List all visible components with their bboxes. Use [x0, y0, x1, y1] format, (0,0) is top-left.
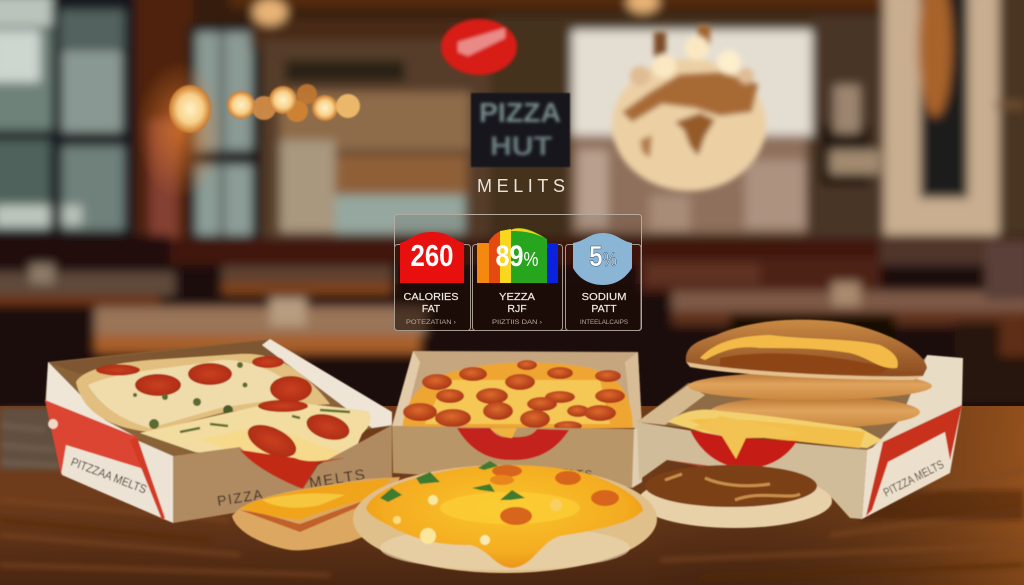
red half circle logo: [457, 428, 569, 460]
stacked melt three: [710, 396, 920, 428]
printed end of box: [45, 400, 173, 523]
large front melt: [353, 461, 657, 573]
box inner walls: [637, 355, 960, 450]
white flaps: [46, 362, 138, 438]
card: calories: [394, 232, 470, 330]
card: sodium: SODIUM: [582, 291, 626, 303]
left pizza box: [45, 339, 392, 523]
nutrition panel: [394, 214, 642, 330]
stacked melt one: [686, 320, 927, 380]
red brown pillar: [135, 0, 193, 280]
tables: [0, 272, 175, 296]
card: sodium: [566, 233, 641, 330]
right wall: [812, 15, 887, 240]
melted cheese: [366, 465, 643, 568]
back walls: [392, 351, 642, 428]
booth band: [0, 238, 1024, 268]
wooden table: [0, 406, 1024, 585]
pepperoni pizza: [402, 360, 633, 431]
front pizza slice: [140, 400, 371, 489]
card: calories: 260: [410, 238, 454, 273]
white back window: [572, 30, 812, 136]
pizza hut chalkboard sign: HUT: [490, 131, 553, 161]
pizza hut chalkboard sign: [471, 93, 570, 167]
central brown wall: [490, 15, 890, 240]
kraft side of box: PIZZA: [216, 486, 265, 509]
cheese melt in box: [668, 410, 882, 458]
blurred restaurant background: [0, 0, 1024, 420]
card: sodium: 5%: [589, 241, 617, 273]
box interior: [45, 339, 392, 456]
kraft side of box: MELTS: [308, 466, 368, 492]
world globe pendant: [612, 25, 766, 191]
mid dark: [0, 265, 1024, 415]
back pizza slice: [76, 354, 330, 432]
right pizza box with stacked melts: [637, 320, 963, 528]
printed end of right box: PITZZA MELTS: [881, 457, 946, 500]
middle pizza box: [392, 351, 642, 488]
printed end of box: PITZZAA MELTS: [69, 455, 149, 496]
middle pizza box: MELTS: [550, 467, 594, 481]
lower melt on table: [638, 460, 833, 528]
red neon sign: [441, 19, 517, 75]
card: calories: FAT: [422, 303, 441, 315]
card: calories: POTEZATIAN ›: [406, 320, 456, 326]
stacked melt two: [688, 372, 932, 400]
card: yezza: YEZZA: [499, 291, 535, 303]
left window: [0, 0, 135, 240]
bokeh lamps: [135, 60, 360, 200]
second window: [188, 25, 264, 240]
small front melt: [232, 477, 400, 550]
card: yezza: [472, 228, 562, 330]
card: yezza: RJF: [507, 303, 527, 315]
pizza hut chalkboard sign: PIZZA: [479, 97, 561, 128]
ceiling beam: [230, 0, 910, 8]
melt toppings: [380, 461, 619, 545]
title: MELITS: [477, 176, 565, 196]
card: yezza: 89%: [496, 240, 539, 273]
card: sodium: PATT: [591, 303, 617, 315]
kraft front with logo: [637, 416, 867, 519]
back shelving wall: [262, 40, 492, 240]
ceiling lamps: [253, 0, 287, 25]
card: calories: CALORIES: [404, 291, 458, 303]
kraft side of box: [173, 425, 392, 523]
kraft front: [392, 425, 642, 488]
card: yezza: PIIZTIIS DAN ›: [492, 320, 542, 326]
card: sodium: INTEELALCAIPS: [580, 320, 628, 326]
printed end of right box: [862, 405, 962, 519]
